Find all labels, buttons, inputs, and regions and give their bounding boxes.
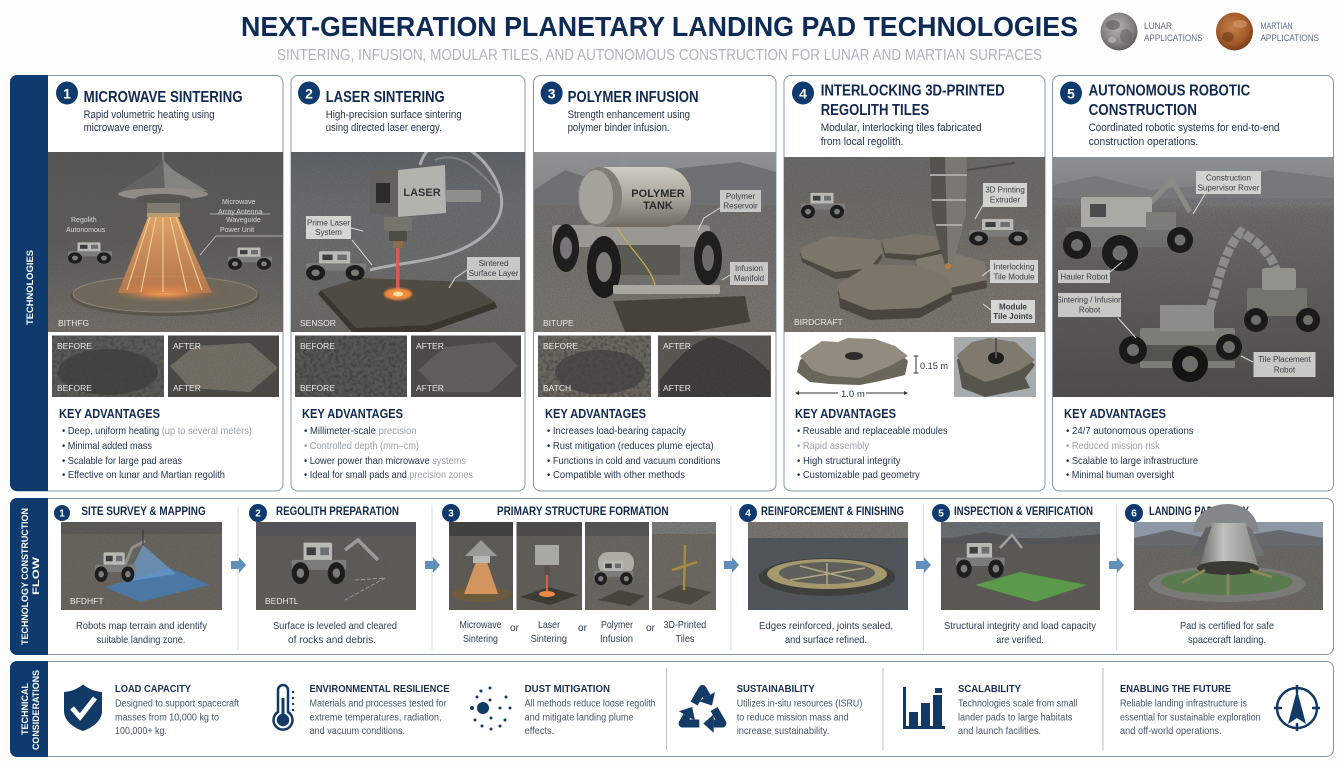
after image: AFTER [416,383,444,393]
option labels: Sintering [531,633,567,645]
item text: masses from 10,000 kg to [115,712,219,724]
heading: LASER SINTERING [326,89,445,106]
key advantages: • Compatible with other methods [547,469,685,481]
step title: INSPECTION & VERIFICATION [954,506,1093,518]
panel: microwave sintering [10,75,283,491]
illustration: microwave emitter: Waveguide [226,217,261,224]
step number: 5 [938,508,944,520]
step text: Structural integrity and load capacity [944,620,1097,632]
item title: ENABLING THE FUTURE [1120,683,1231,695]
number badge 4: 4 [799,86,807,102]
illustration: polymer tank rover: POLYMER [631,188,685,200]
diagram: tile with dimensions [795,338,948,400]
option labels [460,619,706,645]
illustration: microwave emitter [48,145,283,332]
item text: All methods reduce loose regolith [525,698,656,710]
step title: REGOLITH PREPARATION [276,506,399,518]
description: Coordinated robotic systems for end-to-end [1089,122,1280,134]
after image [658,336,771,397]
illustration: microwave emitter: Power Unit [220,227,254,234]
illustration: robot team: Hauler Robot [1060,272,1108,282]
heading: CONSTRUCTION [1089,102,1197,119]
key advantages: • Rapid assembly [797,440,870,452]
illustration: microwave emitter: BITHFG [58,318,89,328]
after image: AFTER [663,341,691,351]
step 2: regolith preparation [249,504,432,650]
key advantages: • Increases load-bearing capacity [547,425,687,437]
item text: and off-world operations. [1120,726,1222,737]
illustration: robot team: Robot [1079,306,1101,314]
heading: MICROWAVE SINTERING [84,89,243,106]
image: microwave option [449,522,513,610]
step number: 3 [448,508,454,520]
title: NEXT-GENERATION PLANETARY LANDING PAD TECHNOLOGIES [241,11,1078,42]
arrow [916,557,931,573]
step number [1125,504,1143,522]
panel: laser sintering [291,76,525,491]
image: laser option [516,522,582,610]
step number: 6 [1131,508,1137,520]
after image: AFTER [416,341,444,351]
step text: spacecraft landing. [1188,634,1266,646]
before image [52,336,164,397]
illustration: laser head: Prime Laser [307,218,350,228]
illustration: microwave emitter: Regolith [71,217,97,224]
item: load capacity [64,683,239,737]
after image [411,336,521,397]
key advantages: • 24/7 autonomous operations [1066,425,1194,437]
illustration: microwave emitter: Autonomous [66,227,106,234]
item title: SUSTAINABILITY [737,683,815,695]
key advantages: • Lower power than microwave systems [304,455,466,467]
key advantages: KEY ADVANTAGES [302,406,403,421]
number badge 3 [541,82,563,104]
icon: thermometer [274,685,294,730]
item text: and vacuum conditions. [310,726,405,737]
before image [538,336,651,397]
illustration: polymer tank rover: Reservoir [723,202,758,210]
illustration: robot team [1053,157,1334,397]
item text: to reduce mission mass and [737,712,849,724]
step image [748,522,908,610]
illustration: tile printing: Module [999,302,1028,312]
option labels: Polymer [601,619,633,631]
key advantages: • Reduced mission risk [1066,440,1160,452]
step image [1134,522,1323,610]
description: Strength enhancement using [568,109,690,121]
option labels: Laser [538,619,560,631]
step 5: inspection [932,504,1116,650]
arrow [425,557,440,573]
step number [249,504,267,522]
before image: BEFORE [300,341,335,351]
arrow [231,557,246,573]
legend: lunar applications [1100,12,1202,50]
step number [739,504,757,522]
illustration: microwave emitter: Array Antenna [218,209,262,216]
key advantages: KEY ADVANTAGES [795,406,896,421]
item: environmental resilience [274,683,450,737]
step number: 1 [59,508,65,520]
panel: construction flow [10,498,1334,655]
before image: BEFORE [57,383,92,393]
item: dust mitigation [470,683,656,737]
illustration: robot team: Construction [1206,174,1251,182]
description: using directed laser energy. [326,122,442,134]
step text: Pad is certified for safe [1180,620,1274,632]
number badge 1 [56,82,78,104]
step number [932,504,950,522]
key advantages: • Millimeter-scale precision [304,425,417,437]
number badge 2 [298,82,320,104]
illustration: laser head [291,143,525,332]
item text: increase sustainability. [737,726,829,737]
step 1: site survey [54,505,238,650]
number badge 4 [792,82,814,104]
item text: lander pads to large habitats [958,712,1072,724]
illustration: laser head: LASER [403,187,441,199]
panel: technical considerations [10,661,1334,757]
item text: Technologies scale from small [958,698,1078,710]
icon: dust particles [470,686,512,730]
step title: LANDING PAD READY [1149,506,1249,518]
item text: 100,000+ kg. [115,726,167,737]
legend: martian applications [1216,12,1319,50]
illustration: tile printing [784,157,1045,332]
item text: Utilizes in-situ resources (ISRU) [737,698,862,710]
before image: BEFORE [57,341,92,351]
item title: ENVIRONMENTAL RESILIENCE [310,683,450,695]
key advantages: • Functions in cold and vacuum conditions [547,455,720,467]
illustration: laser head: Sintered [479,259,508,268]
number badge 5 [1060,82,1082,104]
illustration: polymer tank rover: Infusion [735,264,763,273]
sidebar line one: TECHNICAL [20,683,30,735]
description: Modular, interlocking tiles fabricated [821,122,982,134]
step title: REINFORCEMENT & FINISHING [761,506,904,518]
illustration: tile printing: 3D Printing [985,186,1025,194]
number badge 3: 3 [548,86,556,102]
illustration: polymer tank rover: Polymer [726,192,756,201]
key advantages: • Minimal human oversight [1066,469,1174,481]
key advantages [302,406,473,481]
illustration: polymer tank rover: TANK [643,200,673,212]
icon: compass [1274,685,1320,731]
illustration: tile printing: Tile Joints [993,312,1033,321]
lunar label: LUNAR [1144,21,1172,32]
step number [442,504,460,522]
item title: LOAD CAPACITY [115,683,191,695]
key advantages: • Controlled depth (mm–cm) [304,440,419,452]
martian label: APPLICATIONS [1260,33,1319,44]
option labels: Tiles [676,633,694,645]
description: microwave energy. [84,122,164,134]
heading: INTERLOCKING 3D-PRINTED [821,82,1005,100]
option labels: Microwave [460,619,502,631]
panel: polymer infusion [534,76,776,491]
step image: BEDHTL [265,596,299,606]
key advantages [1064,406,1198,481]
key advantages: KEY ADVANTAGES [545,406,646,421]
arrow [724,557,739,573]
icon: mars [1216,12,1253,50]
item text: extreme temperatures, radiation, [310,712,442,724]
item title: SCALABILITY [958,683,1021,695]
step image [256,522,416,610]
image: printed tile option [652,522,716,610]
number badge 1: 1 [63,86,71,102]
number badge 5: 5 [1067,86,1075,102]
image: polymer option [585,522,649,610]
key advantages: • Rust mitigation (reduces plume ejecta) [547,440,714,452]
option labels: or [646,622,655,634]
step title: SITE SURVEY & MAPPING [81,506,206,518]
key advantages [795,406,948,481]
item: enabling the future [1120,683,1320,737]
illustration: tile printing: BIRDCRAFT [794,317,843,327]
key advantages: • Minimal added mass [62,440,152,452]
heading: REGOLITH TILES [821,102,929,119]
key advantages: • Scalable for large pad areas [62,455,182,467]
illustration: laser head: System [315,228,342,237]
illustration: robot team: Tile Placement [1258,355,1312,364]
item text: Designed to support spacecraft [115,698,239,710]
illustration: robot team: Sintering / Infusion [1056,296,1123,304]
step title: PRIMARY STRUCTURE FORMATION [497,506,669,518]
option labels: or [578,622,587,634]
step text: and surface refined. [785,634,867,646]
diagram: tile with dimensions: 0.15 m [920,361,948,372]
heading: AUTONOMOUS ROBOTIC [1089,82,1251,100]
before image: BATCH [543,383,571,393]
subtitle: SINTERING, INFUSION, MODULAR TILES, AND AUTONOMOUS CONSTRUCTION FOR LUNAR AND MARTIAN SURFACES [277,47,1042,64]
item: sustainability [676,683,862,737]
icon: shield [64,684,102,731]
item text: Materials and processes tested for [310,698,447,710]
step text: Surface is leveled and cleared [273,620,397,632]
sidebar label: TECHNOLOGIES [25,250,35,325]
illustration: polymer tank rover [534,141,776,332]
option labels: or [510,622,519,634]
key advantages: • High structural integrity [797,455,901,467]
option labels: Sintering [463,633,498,645]
step number: 2 [255,508,261,520]
description: Rapid volumetric heating using [84,109,215,121]
option labels: 3D-Printed [664,619,706,631]
sidebar line one: TECHNOLOGY CONSTRUCTION [20,508,30,645]
key advantages: • Ideal for small pads and precision zones [304,469,473,481]
panel: autonomous robotic construction [1052,76,1334,491]
key advantages: KEY ADVANTAGES [1064,406,1166,421]
description: from local regolith. [821,136,903,148]
key advantages: • Customizable pad geometry [797,469,920,481]
description: construction operations. [1089,136,1198,148]
diagram: tile with dimensions: 1.0 m [841,389,865,400]
after image: AFTER [173,383,201,393]
step 4: reinforcement [739,504,924,650]
key advantages: • Scalable to large infrastructure [1066,455,1198,467]
step image [61,522,222,610]
key advantages: KEY ADVANTAGES [59,406,160,421]
step number: 4 [745,508,751,520]
step number [54,505,70,521]
icon: recycle [676,689,727,734]
step 6: landing pad ready [1125,504,1323,646]
before image: BEFORE [300,383,335,393]
illustration: robot team: Robot [1274,366,1296,374]
before image: BEFORE [543,341,578,351]
step image [941,522,1100,610]
martian label: MARTIAN [1260,21,1293,32]
illustration: microwave emitter: Microwave [222,199,256,206]
key advantages: • Effective on lunar and Martian regolith [62,469,225,481]
illustration: polymer tank rover: BITUPE [543,318,574,328]
item: scalability [903,683,1078,737]
description: polymer binder infusion. [568,122,670,134]
illustration: polymer tank rover: Manifold [734,274,764,283]
number badge 2: 2 [305,86,313,102]
panel: interlocking tiles [784,76,1045,491]
option labels: Infusion [600,633,633,645]
photo: printed tile [954,337,1036,397]
sidebar line two: FLOW [31,556,41,595]
item text: effects. [525,726,554,737]
sidebar line two: CONSIDERATIONS [31,670,41,750]
step text: are verified. [996,634,1044,646]
illustration: tile printing: Extruder [990,196,1020,204]
item title: DUST MITIGATION [525,683,610,695]
key advantages [545,406,720,481]
step text: of rocks and debris. [288,634,376,646]
before image [295,336,407,397]
step text: Edges reinforced, joints sealed, [759,620,893,632]
step text: Robots map terrain and identify [76,620,208,632]
step image: BFDHFT [70,596,104,606]
illustration: laser head: SENSOR [300,318,336,328]
key advantages: • Reusable and replaceable modules [797,425,948,437]
item text: and mitigate landing plume [525,712,634,724]
item text: Reliable landing infrastructure is [1120,698,1247,710]
illustration: tile printing: Interlocking [994,262,1034,272]
illustration: robot team: Supervisor Rover [1198,184,1260,192]
lunar label: APPLICATIONS [1144,33,1202,44]
illustration: tile printing: Tile Module [993,272,1035,282]
step 3: primary structure formation [442,504,731,650]
icon: bar chart [903,687,945,729]
heading: POLYMER INFUSION [568,89,699,106]
after image [168,336,279,397]
arrow [1109,557,1124,573]
after image: AFTER [663,383,691,393]
after image: AFTER [173,341,201,351]
item text: and launch facilities. [958,726,1041,737]
step text: suitable landing zone. [97,634,185,646]
item text: essential for sustainable exploration [1120,712,1261,724]
description: High-precision surface sintering [326,109,462,121]
key advantages [59,406,252,481]
illustration: laser head: Surface Layer [469,269,519,278]
icon: moon [1100,12,1138,50]
illustration: lander [1182,504,1272,595]
key advantages: • Deep, uniform heating (up to several meters) [62,425,252,437]
